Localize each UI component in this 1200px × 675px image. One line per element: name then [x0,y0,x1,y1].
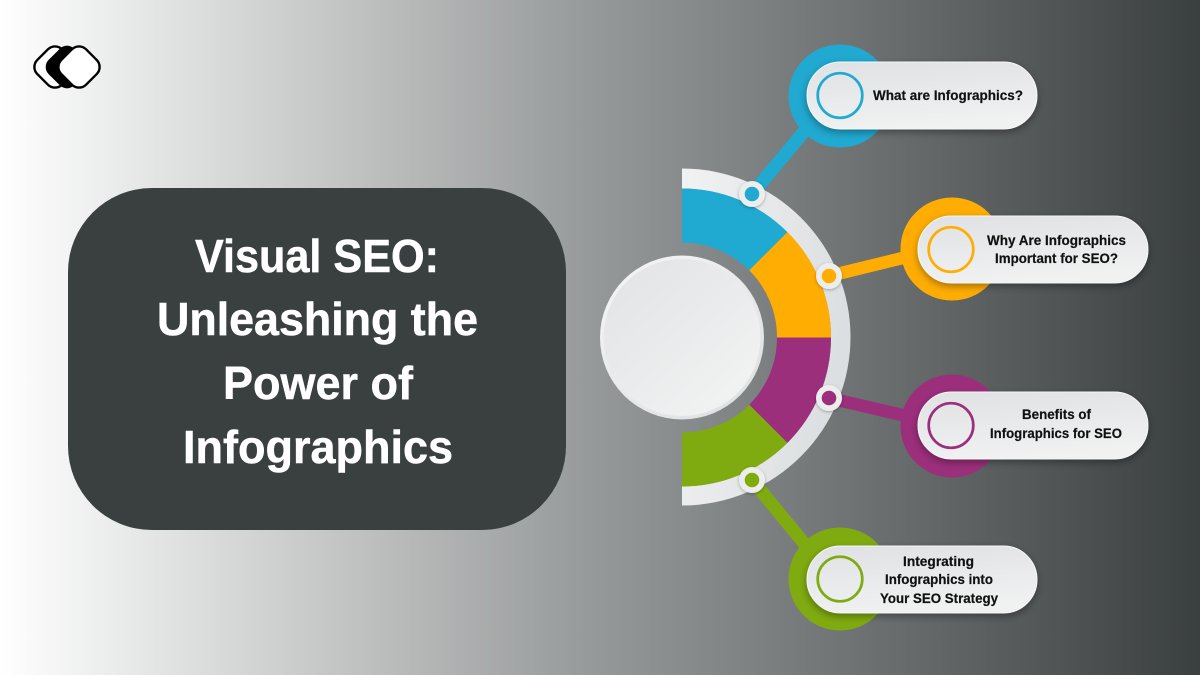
node: green [739,467,765,493]
segmented semicircle [682,188,831,486]
title [157,230,478,473]
item: Why Are Infographics Important: Important for SEO? [995,250,1118,266]
item: Integrating Infographics: Infographics into [885,571,993,587]
node: purple [816,385,842,411]
item: Benefits of Infographics [900,374,1148,478]
logo [30,42,104,92]
connector: blue [752,122,812,194]
semicircular outer ring [682,168,850,506]
connector: orange [829,255,915,276]
title: Power of [223,357,414,409]
item: Integrating Infographics: Integrating [903,553,974,569]
item: What are Infographics: What are Infographics? [873,87,1023,103]
connector: purple [829,398,915,418]
title: Visual SEO: [195,230,439,282]
title panel [68,188,566,530]
item: Benefits of Infographics: Benefits of [1022,406,1091,422]
node: blue [739,181,765,207]
item: Benefits of Infographics: Infographics for SEO [990,425,1122,441]
title: Unleashing the [157,293,478,345]
segment: blue [682,188,787,270]
segment: purple [749,338,831,443]
item: What are Infographics [788,44,1037,148]
item: Integrating Infographics [788,528,1037,630]
item: Why Are Infographics Important [900,198,1148,300]
segment: green [682,405,787,486]
title: Infographics [183,421,453,473]
item: Integrating Infographics: Your SEO Strategy [880,590,998,606]
central disc [600,256,764,420]
item: Why Are Infographics Important: Why Are Infographics [987,232,1126,248]
segment: orange [749,232,831,338]
connector: green [752,480,812,553]
node: orange [816,263,842,289]
